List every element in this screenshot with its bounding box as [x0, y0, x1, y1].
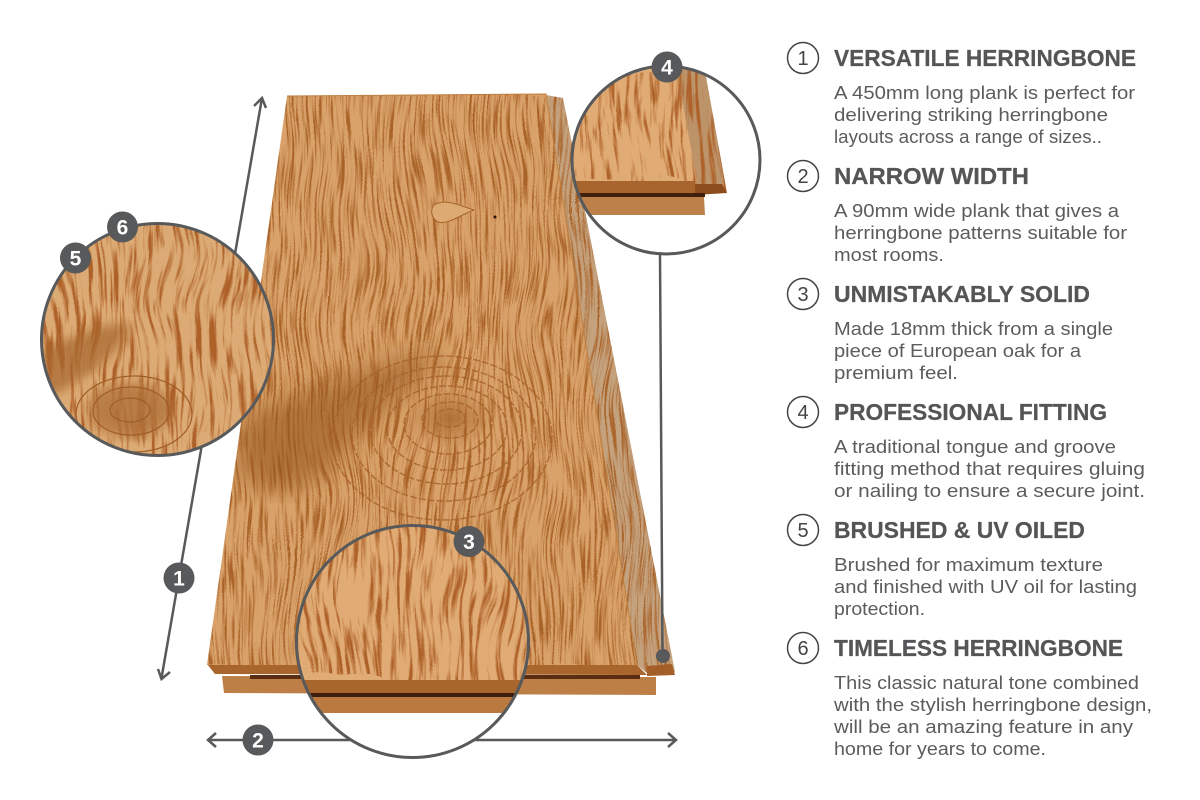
feature 3 — [788, 278, 1113, 383]
badge 3 — [454, 526, 484, 557]
dark figure band — [235, 345, 440, 489]
knot — [88, 383, 172, 437]
feature 5: protection. — [834, 599, 925, 619]
feature 6: TIMELESS HERRINGBONE — [834, 635, 1123, 661]
badge 4 — [652, 52, 682, 82]
feature 6: with the stylish herringbone design, — [833, 695, 1152, 715]
feature 6 — [788, 632, 1152, 759]
zoomed tongue end — [695, 184, 727, 195]
feature 3: 3 — [797, 284, 809, 306]
feature 2: A 90mm wide plank that gives a — [834, 201, 1120, 221]
cathedral knot — [414, 393, 486, 443]
feature 6: will be an amazing feature in any — [833, 717, 1133, 737]
badge 5: 5 — [70, 248, 82, 270]
magnifier 5 and 6 — [40, 220, 276, 460]
feature 5 — [788, 514, 1137, 619]
feature 6: home for years to come. — [834, 739, 1046, 759]
feature 1: A 450mm long plank is perfect for — [834, 83, 1135, 103]
badge 5 — [60, 242, 91, 274]
feature 1: layouts across a range of sizes.. — [834, 127, 1102, 147]
plank: top face — [200, 90, 645, 670]
feature 4: 4 — [797, 402, 809, 424]
feature 1 — [788, 42, 1136, 147]
badge 2 — [242, 724, 274, 756]
plank: shadow gap — [250, 675, 640, 679]
plank: lower groove lip — [222, 676, 656, 695]
feature 3: Made 18mm thick from a single — [834, 319, 1113, 339]
zoomed front edge — [576, 181, 695, 193]
zoomed face — [295, 520, 531, 680]
zoomed shadow — [570, 193, 705, 197]
feature 2: 2 — [797, 166, 809, 188]
feature 4: A traditional tongue and groove — [834, 437, 1116, 457]
zoomed face — [574, 68, 697, 182]
small knot — [432, 202, 474, 223]
feature 6: This classic natural tone combined — [834, 673, 1139, 693]
feature 4 — [788, 396, 1145, 501]
feature 4: PROFESSIONAL FITTING — [834, 399, 1107, 425]
feature 5: and finished with UV oil for lasting — [834, 577, 1137, 597]
zoomed lip — [312, 697, 512, 713]
magnifier 3 — [295, 520, 531, 758]
badge 2: 2 — [252, 730, 264, 752]
feature 6: 6 — [797, 638, 809, 660]
plank: tongue strip — [546, 95, 675, 673]
zoomed tongue — [678, 69, 727, 193]
oak plank — [200, 90, 680, 695]
feature 2: herringbone patterns suitable for — [834, 223, 1127, 243]
feature 3: piece of European oak for a — [834, 341, 1082, 361]
feature 1: VERSATILE HERRINGBONE — [834, 45, 1136, 71]
feature 3: premium feel. — [834, 363, 958, 383]
plank: tongue front — [647, 664, 675, 676]
badge 6: 6 — [117, 216, 128, 240]
zoomed lip — [570, 197, 705, 215]
feature 2: NARROW WIDTH — [834, 163, 1029, 189]
feature 2 — [788, 160, 1127, 265]
feature 4: fitting method that requires gluing — [834, 459, 1145, 479]
badge 3: 3 — [463, 531, 475, 554]
dark figure patch — [40, 324, 130, 400]
zoomed shadow — [310, 693, 515, 697]
feature 1: 1 — [797, 48, 809, 70]
feature 5: BRUSHED & UV OILED — [834, 517, 1085, 543]
badge 1 — [164, 562, 194, 594]
zoomed front edge — [295, 680, 531, 693]
magnifier 4 — [565, 60, 760, 254]
feature 4: or nailing to ensure a secure joint. — [834, 481, 1145, 501]
badge 1: 1 — [173, 568, 185, 590]
badge 6 — [107, 212, 138, 242]
arrow: length dimension — [158, 98, 266, 679]
feature 2: most rooms. — [834, 245, 944, 265]
arrow: width dimension — [208, 733, 676, 747]
feature 5: 5 — [797, 520, 809, 542]
plank: front edge — [207, 664, 647, 675]
feature 3: UNMISTAKABLY SOLID — [834, 281, 1090, 307]
feature 5: Brushed for maximum texture — [834, 555, 1103, 575]
feature 1: delivering striking herringbone — [834, 105, 1108, 125]
plank: outline — [287, 94, 637, 665]
badge 4: 4 — [661, 56, 673, 80]
leader line to tongue — [656, 254, 670, 663]
